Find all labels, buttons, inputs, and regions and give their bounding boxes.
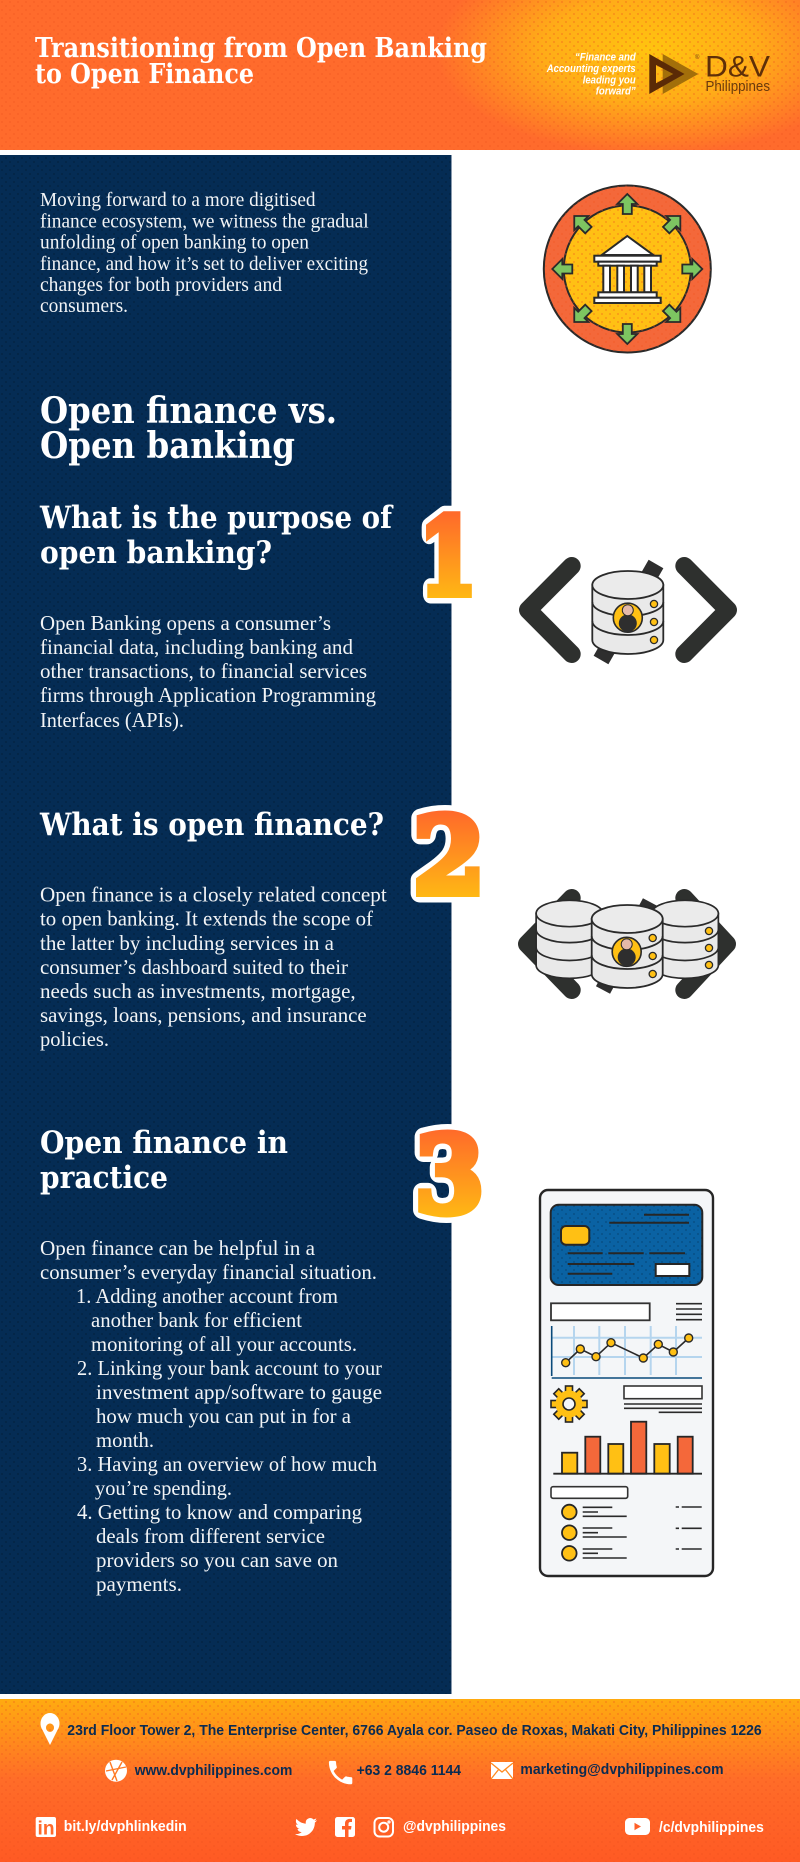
text: open finance in practice list: deals from different service bbox=[96, 1524, 325, 1548]
text: open banking description: firms through Application Programming bbox=[40, 683, 376, 707]
youtube channel: /c/dvphilippines bbox=[659, 1819, 764, 1836]
list rows bbox=[562, 1505, 702, 1561]
text: open finance description: savings, loans, pensions, and insurance bbox=[40, 1003, 367, 1027]
text: open finance description: policies. bbox=[40, 1027, 109, 1051]
text: open banking description bbox=[40, 611, 376, 732]
heading: open finance vs open banking: Open finance vs. bbox=[40, 390, 337, 432]
text: open finance in practice list: consumer’s everyday financial situation. bbox=[40, 1260, 377, 1284]
text: open finance description: the latter by including services in a bbox=[40, 931, 335, 955]
icon: instagram bbox=[374, 1818, 393, 1836]
text: open finance description bbox=[40, 883, 387, 1051]
number 2: 2 bbox=[413, 793, 485, 918]
tagline bbox=[546, 52, 636, 97]
icon: youtube bbox=[625, 1818, 650, 1835]
text: open finance in practice list: Open finance can be helpful in a bbox=[40, 1236, 316, 1260]
icon: phone bbox=[329, 1761, 352, 1784]
intro text: changes for both providers and bbox=[40, 274, 282, 296]
website: www.dvphilippines.com bbox=[134, 1762, 292, 1779]
heading: purpose of open banking: open banking? bbox=[40, 535, 272, 571]
text: open finance in practice list: another bank for efficient bbox=[91, 1308, 302, 1332]
intro text: unfolding of open banking to open bbox=[40, 232, 309, 254]
number 1: 1 bbox=[419, 494, 477, 619]
text: open finance in practice list: 3. Having an overview of how much bbox=[77, 1452, 377, 1476]
text: open finance in practice list: 1. Adding another account from bbox=[76, 1284, 338, 1308]
icon: mail bbox=[491, 1762, 513, 1779]
line chart bbox=[552, 1326, 702, 1378]
title: to Open Finance bbox=[35, 59, 254, 90]
icon: api database bbox=[528, 564, 728, 660]
text: open banking description: financial data, including banking and bbox=[40, 635, 353, 659]
panel: navy content column bbox=[0, 155, 452, 1694]
phone number: +63 2 8846 1144 bbox=[357, 1762, 462, 1779]
text: open banking description: other transactions, to financial services bbox=[40, 659, 367, 683]
heading: purpose of open banking bbox=[39, 500, 393, 571]
icon: bank with arrows bbox=[544, 186, 711, 352]
heading: open finance in practice: practice bbox=[40, 1160, 168, 1196]
text: open banking description: Interfaces (APIs). bbox=[40, 708, 184, 732]
text: open finance description: needs such as investments, mortgage, bbox=[40, 979, 356, 1003]
text: open finance description: consumer’s dashboard suited to their bbox=[40, 955, 348, 979]
text: open finance in practice list: payments. bbox=[96, 1572, 182, 1596]
number 3: 3 bbox=[415, 1112, 484, 1237]
text: open finance in practice list: providers so you can save on bbox=[96, 1548, 338, 1572]
text: open finance in practice list: 2. Linking your bank account to your bbox=[77, 1356, 382, 1380]
intro text: consumers. bbox=[40, 295, 128, 317]
text: open finance description: to open banking. It extends the scope of bbox=[40, 907, 373, 931]
logo: D&V Philippines: Philippines bbox=[706, 79, 770, 95]
tagline: leading you bbox=[583, 74, 636, 86]
number 3: 3 bbox=[415, 1112, 484, 1237]
address: 23rd Floor Tower 2, The Enterprise Center, 6766 Ayala cor. Paseo de Roxas, Makati City, Philippines 1226 bbox=[67, 1722, 762, 1739]
icon: linkedin: in bbox=[38, 1818, 54, 1840]
heading: open finance in practice bbox=[40, 1125, 288, 1196]
icon: globe bbox=[105, 1760, 127, 1782]
footer banner bbox=[0, 1699, 800, 1862]
heading: what is open finance: What is open finance? bbox=[39, 807, 384, 843]
intro text bbox=[40, 189, 369, 317]
heading: purpose of open banking: What is the purpose of bbox=[39, 500, 393, 536]
icon: gear bbox=[551, 1386, 587, 1422]
title: Transitioning from Open Banking bbox=[35, 33, 487, 64]
logo: D&V Philippines bbox=[649, 51, 770, 95]
header banner bbox=[0, 0, 800, 150]
instagram handle: @dvphilippines bbox=[403, 1818, 506, 1835]
tagline: “Finance and bbox=[575, 52, 636, 64]
heading: open finance in practice: Open finance in bbox=[40, 1125, 288, 1161]
icon: location pin bbox=[40, 1713, 60, 1745]
text: open finance in practice list: monitoring of all your accounts. bbox=[91, 1332, 357, 1356]
intro text: finance, and how it’s set to deliver exciting bbox=[40, 253, 368, 275]
title bbox=[35, 33, 487, 90]
text: open finance description: Open finance is a closely related concept bbox=[40, 883, 387, 907]
bar chart bbox=[553, 1422, 702, 1474]
linkedin link: bit.ly/dvphlinkedin bbox=[64, 1818, 187, 1835]
credit card bbox=[551, 1205, 702, 1285]
logo: D&V Philippines: D&V bbox=[705, 51, 770, 84]
number 2: 2 bbox=[413, 793, 485, 918]
text: open finance in practice list: investment app/software to gauge bbox=[96, 1380, 382, 1404]
text: open finance in practice list: month. bbox=[96, 1428, 154, 1452]
tagline: Accounting experts bbox=[546, 63, 636, 75]
icon: facebook bbox=[335, 1817, 355, 1837]
text: open banking description: Open Banking opens a consumer’s bbox=[40, 611, 331, 635]
text: open finance in practice list: how much you can put in for a bbox=[96, 1404, 352, 1428]
icon: twitter bbox=[295, 1818, 317, 1836]
icon: multiple databases bbox=[527, 898, 727, 990]
heading: open finance vs open banking: Open banking bbox=[40, 425, 295, 467]
text: open finance in practice list bbox=[40, 1236, 382, 1596]
intro text: Moving forward to a more digitised bbox=[40, 189, 316, 211]
text: open finance in practice list: you’re spending. bbox=[95, 1476, 232, 1500]
heading: open finance vs open banking bbox=[40, 390, 337, 467]
number 1: 1 bbox=[419, 494, 477, 619]
intro text: finance ecosystem, we witness the gradual bbox=[40, 210, 369, 232]
text: open finance in practice list: 4. Getting to know and comparing bbox=[77, 1500, 362, 1524]
icon: phone dashboard bbox=[540, 1190, 713, 1576]
logo: D&V Philippines: ® bbox=[695, 54, 700, 61]
email: marketing@dvphilippines.com bbox=[520, 1761, 724, 1778]
tagline: forward” bbox=[596, 85, 636, 97]
